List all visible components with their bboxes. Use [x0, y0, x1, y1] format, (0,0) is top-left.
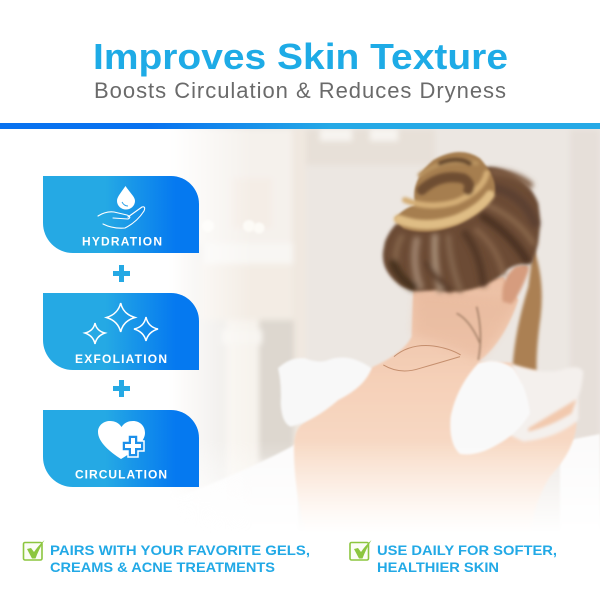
blurred room background — [192, 129, 600, 506]
icon: green check 2 — [350, 540, 372, 560]
icon: green check 1 — [24, 540, 44, 560]
neck shading — [420, 314, 498, 355]
hair bun — [395, 152, 495, 232]
callout: use daily — [350, 540, 557, 575]
ponytail — [513, 247, 542, 372]
icon: heart with cross — [98, 421, 145, 459]
text: use daily: HEALTHIER SKIN — [377, 559, 499, 575]
ear — [502, 265, 529, 304]
hair strands — [393, 172, 535, 290]
bun strands — [398, 160, 490, 225]
header rule — [0, 123, 600, 129]
neck and back — [293, 276, 577, 496]
label: exfoliation: EXFOLIATION — [75, 352, 167, 366]
stray hair at nape — [457, 307, 480, 360]
title: Improves Skin Texture — [93, 36, 508, 77]
hair mass — [383, 167, 540, 292]
text: pairs with gels: PAIRS WITH YOUR FAVORITE GELS, — [50, 542, 310, 558]
skin patch in foam — [528, 399, 577, 432]
text: use daily: USE DAILY FOR SOFTER, — [377, 542, 557, 558]
bathtub — [220, 434, 600, 501]
text: pairs with gels: CREAMS & ACNE TREATMENTS — [50, 559, 275, 575]
panel: hydration — [43, 176, 199, 253]
foam: left shoulder — [278, 357, 372, 427]
panel: circulation — [43, 410, 199, 487]
plus sign 1 — [113, 265, 130, 282]
foam: right shoulder wing — [500, 363, 583, 442]
callout: pairs with gels — [24, 540, 310, 575]
panel: exfoliation — [43, 293, 199, 370]
label: circulation: CIRCULATION — [75, 468, 167, 482]
icon: sparkles — [85, 303, 158, 344]
icon: water drop in hand — [98, 186, 145, 228]
plus sign 2 — [113, 380, 130, 397]
label: hydration: HYDRATION — [82, 234, 162, 248]
foam: right shoulder — [450, 361, 530, 454]
photo: woman in bubble bath — [192, 129, 600, 514]
subtitle: Boosts Circulation & Reduces Dryness — [94, 78, 506, 103]
necklace — [383, 346, 461, 371]
